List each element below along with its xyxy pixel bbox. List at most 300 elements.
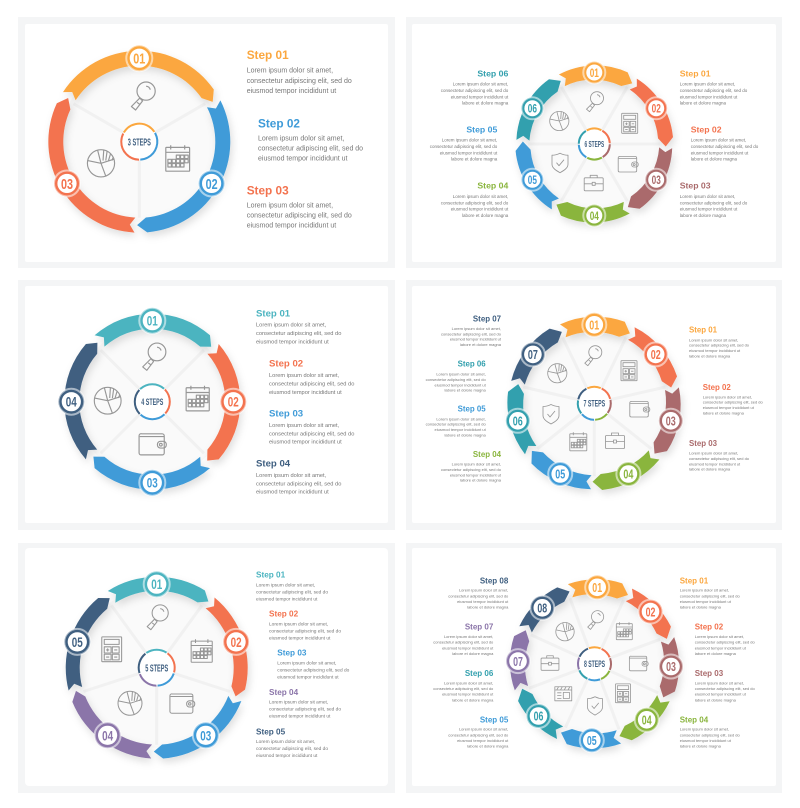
text: step 04: eiusmod tempor incididunt ut xyxy=(269,714,331,720)
text: step 05 xyxy=(448,715,509,749)
text: step 07: Lorem ipsum dolor sit amet, xyxy=(452,326,501,331)
text: step 03: Step 03 xyxy=(277,649,307,658)
icon: pie chart xyxy=(87,150,115,177)
badge 07 xyxy=(506,649,530,673)
badge 02: 02 xyxy=(651,347,661,362)
badge 01 xyxy=(139,308,165,334)
text: step 01: eiusmod tempor incididunt ut xyxy=(680,94,738,99)
text: step 02: consectetur adipiscing elit, sed do xyxy=(269,628,341,634)
badge 06 xyxy=(521,97,543,119)
text: step 05: labore et dolore magna xyxy=(467,744,509,749)
text: step 06 xyxy=(433,669,494,702)
text: step 04: Lorem ipsum dolor sit amet, xyxy=(453,194,508,199)
icon: calendar xyxy=(616,622,632,640)
text: step 04: consectetur adipiscing elit, sed do xyxy=(441,467,502,472)
text: step 03: consectetur adipiscing elit, sed do xyxy=(680,200,748,205)
text: step 03: eiusmod tempor incididunt ut xyxy=(689,461,741,466)
badge 02 xyxy=(638,600,662,624)
text: step 01: Lorem ipsum dolor sit amet, xyxy=(680,82,735,87)
text: step 05: Step 05 xyxy=(466,124,497,134)
icon: calendar xyxy=(186,386,209,411)
text: step 05: Step 05 xyxy=(256,727,286,736)
text: step 03: eiusmod tempor incididunt ut xyxy=(247,223,336,230)
icon: magnifier xyxy=(585,346,602,366)
badge 01: 01 xyxy=(589,317,599,332)
text: step 01 xyxy=(256,571,328,602)
badge 03 xyxy=(659,654,683,678)
text: step 01: Lorem ipsum dolor sit amet, xyxy=(247,68,333,75)
badge 04: 04 xyxy=(623,467,634,482)
text: step 06: labore et dolore magna xyxy=(462,101,509,106)
text: step 02: Step 02 xyxy=(269,359,303,370)
icon: briefcase xyxy=(541,656,559,670)
badge 04: 04 xyxy=(590,209,599,223)
badge 01 xyxy=(144,571,170,597)
text: step 02: labore et dolore magna xyxy=(703,410,745,415)
text: step 02: labore et dolore magna xyxy=(691,157,737,162)
text: step 01 xyxy=(247,48,352,95)
text: step 04 xyxy=(441,181,509,218)
icon: calculator xyxy=(102,637,122,662)
badge 01 xyxy=(126,45,152,71)
text: step 06: Step 06 xyxy=(477,69,508,79)
badge 05 xyxy=(548,462,572,486)
icon: briefcase xyxy=(584,175,603,191)
text: step 04: labore et dolore magna xyxy=(462,213,509,218)
badge 03 xyxy=(139,470,165,496)
icon: calendar xyxy=(570,432,587,451)
badge 03 xyxy=(659,409,683,433)
text: step 04: Lorem ipsum dolor sit amet, xyxy=(269,700,328,706)
text: step 03: labore et dolore magna xyxy=(680,213,726,218)
centre label: 4 STEPS xyxy=(141,397,163,408)
text: step 06: consectetur adipiscing elit, sed do xyxy=(441,88,509,93)
badge 07: 07 xyxy=(528,347,538,362)
badge 03: 03 xyxy=(200,727,211,743)
icon: shield check xyxy=(552,153,568,173)
panel: 7 steps xyxy=(406,280,782,530)
badge 06: 06 xyxy=(528,102,537,116)
centre label xyxy=(131,642,182,693)
badge 04 xyxy=(95,722,121,748)
text: step 03: Step 03 xyxy=(269,409,303,420)
text: step 06: Lorem ipsum dolor sit amet, xyxy=(436,372,486,377)
icon: magnifier xyxy=(131,82,155,110)
text: step 04: eiusmod tempor incididunt ut xyxy=(256,490,329,496)
icon: calendar xyxy=(191,639,212,662)
text: step 03 xyxy=(247,183,352,230)
text: step 08: labore et dolore magna xyxy=(467,605,509,610)
icon: wallet xyxy=(139,434,166,455)
badge 01: 01 xyxy=(133,51,145,68)
text: step 03: Step 03 xyxy=(695,669,724,678)
text: step 04 xyxy=(441,450,502,483)
text: step 02: Lorem ipsum dolor sit amet, xyxy=(695,634,744,639)
badge 03: 03 xyxy=(652,173,661,187)
text: step 06: labore et dolore magna xyxy=(452,697,494,702)
text: step 02: Step 02 xyxy=(258,116,300,130)
text: step 04 xyxy=(269,688,341,720)
text: step 07: consectetur adipiscing elit, sed do xyxy=(441,331,502,336)
icon: wallet xyxy=(170,694,195,713)
text: step 01: eiusmod tempor incididunt ut xyxy=(680,599,732,604)
panel: 3 steps xyxy=(18,17,395,268)
text: step 02: Step 02 xyxy=(695,623,724,632)
text: step 02: Step 02 xyxy=(269,610,299,619)
text: step 04: labore et dolore magna xyxy=(460,478,502,483)
icon: wallet xyxy=(629,656,648,671)
text: step 06: consectetur adipiscing elit, sed do xyxy=(433,686,494,691)
text: step 05 xyxy=(430,124,498,162)
text: step 02: eiusmod tempor incididunt ut xyxy=(269,390,342,396)
text: step 04: eiusmod tempor incididunt ut xyxy=(451,207,509,212)
badge 03: 03 xyxy=(666,659,676,674)
panel: 6 steps xyxy=(406,17,782,268)
text: step 04: Lorem ipsum dolor sit amet, xyxy=(452,462,501,467)
arrow ring xyxy=(64,314,240,490)
badge 02 xyxy=(199,170,225,196)
panel: 5 steps xyxy=(18,543,395,793)
text: step 04: Step 04 xyxy=(473,450,502,459)
text: step 02: Lorem ipsum dolor sit amet, xyxy=(703,394,752,399)
text: step 03: Step 03 xyxy=(680,181,711,191)
text: step 01: Lorem ipsum dolor sit amet, xyxy=(689,337,738,342)
icon: magnifier xyxy=(588,611,604,629)
text: step 04: consectetur adipiscing elit, sed do xyxy=(256,481,341,487)
badge 05 xyxy=(521,169,543,191)
text: step 05: eiusmod tempor incididunt ut xyxy=(256,753,318,759)
text: step 03 xyxy=(680,181,748,218)
text: step 01 xyxy=(689,326,750,358)
text: step 04: consectetur adipiscing elit, sed do xyxy=(269,707,341,713)
badge 01 xyxy=(585,575,609,599)
text: step 04: Step 04 xyxy=(477,181,508,191)
text: step 02: consectetur adipiscing elit, sed do xyxy=(691,144,759,149)
text: step 02 xyxy=(269,359,354,396)
badge 01: 01 xyxy=(147,313,158,329)
centre label: 3 STEPS xyxy=(128,137,151,148)
badge 04 xyxy=(58,389,84,415)
text: step 02: eiusmod tempor incididunt ut xyxy=(269,635,331,641)
text: step 01: labore et dolore magna xyxy=(689,353,731,358)
icon: pie chart xyxy=(556,622,574,641)
text: step 07: Lorem ipsum dolor sit amet, xyxy=(444,634,493,639)
text: step 06: Step 06 xyxy=(465,669,494,678)
text: step 02: Lorem ipsum dolor sit amet, xyxy=(269,373,340,379)
badge 02: 02 xyxy=(646,604,655,619)
centre label xyxy=(114,117,164,167)
text: step 05 xyxy=(256,727,328,759)
arrow ring xyxy=(509,578,680,749)
text: step 05: consectetur adipiscing elit, sed do xyxy=(426,422,486,427)
centre label: 6 STEPS xyxy=(584,139,604,149)
text: step 01: Step 01 xyxy=(689,326,718,335)
text: step 02: labore et dolore magna xyxy=(695,651,737,656)
text: step 03: eiusmod tempor incididunt ut xyxy=(269,440,342,446)
text: step 01: Step 01 xyxy=(680,576,709,585)
text: step 01: consectetur adipiscing elit, sed do xyxy=(680,88,748,93)
text: step 03: consectetur adipiscing elit, sed do xyxy=(689,456,750,461)
text: step 01: consectetur adipiscing elit, sed do xyxy=(256,589,328,595)
text: step 03: Lorem ipsum dolor sit amet, xyxy=(680,194,735,199)
icon: wallet xyxy=(618,156,638,172)
text: step 02: Lorem ipsum dolor sit amet, xyxy=(269,621,328,627)
badge 02 xyxy=(223,629,249,655)
text: step 08: consectetur adipiscing elit, sed do xyxy=(448,593,509,598)
text: step 02: Step 02 xyxy=(691,124,722,134)
text: step 01: eiusmod tempor incididunt ut xyxy=(256,596,318,602)
badge 03 xyxy=(645,169,667,191)
badge 02: 02 xyxy=(206,176,218,193)
text: step 04 xyxy=(256,459,341,496)
text: step 05: eiusmod tempor incididunt ut xyxy=(457,738,509,743)
text: step 03 xyxy=(277,649,350,680)
text: step 05: consectetur adipiscing elit, sed do xyxy=(256,746,328,752)
centre label: 8 STEPS xyxy=(584,659,605,669)
badge 02: 02 xyxy=(228,394,239,410)
centre label xyxy=(573,123,616,165)
badge 02 xyxy=(644,342,668,366)
text: step 08: Step 08 xyxy=(480,576,509,585)
text: step 06: Lorem ipsum dolor sit amet, xyxy=(453,82,508,87)
text: step 03 xyxy=(689,439,750,472)
wheel: 8 steps xyxy=(506,575,683,752)
text: step 07: labore et dolore magna xyxy=(452,651,494,656)
badge 02 xyxy=(220,389,246,415)
text: step 06: consectetur adipiscing elit, sed do xyxy=(426,377,486,382)
icon: calendar xyxy=(166,145,190,171)
text: step 03: labore et dolore magna xyxy=(689,467,731,472)
text: step 03: Lorem ipsum dolor sit amet, xyxy=(689,451,738,456)
icon: magnifier xyxy=(143,343,166,370)
text: step 02 xyxy=(691,124,759,162)
text: step 08: Lorem ipsum dolor sit amet, xyxy=(459,588,508,593)
text: step 01: labore et dolore magna xyxy=(680,101,726,106)
text: step 01: eiusmod tempor incididunt ut xyxy=(247,88,336,95)
text: step 03: consectetur adipiscing elit, sed do xyxy=(269,431,354,437)
badge 07: 07 xyxy=(513,654,523,669)
badge 04: 04 xyxy=(642,712,652,727)
icon: shield check xyxy=(543,404,559,424)
text: step 06: Lorem ipsum dolor sit amet, xyxy=(444,680,493,685)
text: step 03: Lorem ipsum dolor sit amet, xyxy=(277,660,336,666)
text: step 03: Lorem ipsum dolor sit amet, xyxy=(695,680,744,685)
text: step 02: consectetur adipiscing elit, sed do xyxy=(258,146,363,153)
text: step 05: eiusmod tempor incididunt ut xyxy=(435,427,487,432)
icon: calculator xyxy=(621,361,637,381)
wheel: 6 steps xyxy=(507,62,681,226)
text: step 02: consectetur adipiscing elit, sed do xyxy=(269,381,354,387)
centre label xyxy=(571,380,618,427)
text: step 07: labore et dolore magna xyxy=(460,342,502,347)
text: step 05: consectetur adipiscing elit, sed do xyxy=(448,732,509,737)
text: step 05 xyxy=(426,405,487,437)
text: step 03: Lorem ipsum dolor sit amet, xyxy=(247,202,333,209)
badge 05: 05 xyxy=(587,733,597,748)
panel: 4 steps xyxy=(18,280,395,530)
text: step 06: Step 06 xyxy=(458,360,486,369)
badge 01: 01 xyxy=(592,580,602,595)
badge 03 xyxy=(54,170,80,196)
icon: pie chart xyxy=(118,691,142,715)
text: step 01: Lorem ipsum dolor sit amet, xyxy=(256,323,327,329)
centre label: 7 STEPS xyxy=(583,399,605,409)
badge 05: 05 xyxy=(72,634,83,650)
text: step 05: Lorem ipsum dolor sit amet, xyxy=(459,727,508,732)
text: step 07: eiusmod tempor incididunt ut xyxy=(450,337,502,342)
text: step 01: Step 01 xyxy=(680,69,711,79)
icon: magnifier xyxy=(147,605,168,630)
text: step 05: Lorem ipsum dolor sit amet, xyxy=(256,739,315,745)
icon: pie chart xyxy=(548,364,567,383)
text: step 05: Lorem ipsum dolor sit amet, xyxy=(436,416,486,421)
text: step 02: Step 02 xyxy=(703,383,731,392)
arrow ring xyxy=(502,317,686,497)
badge 04 xyxy=(616,462,640,486)
text: step 02 xyxy=(695,623,756,656)
text: step 05: consectetur adipiscing elit, sed do xyxy=(430,144,498,149)
wheel: 3 steps xyxy=(23,45,256,253)
text: step 03: eiusmod tempor incididunt ut xyxy=(680,207,738,212)
text: step 07: Step 07 xyxy=(473,315,502,324)
badge 08 xyxy=(530,596,554,620)
badge 06 xyxy=(506,409,530,433)
text: step 04: eiusmod tempor incididunt ut xyxy=(450,472,502,477)
text: step 02: eiusmod tempor incididunt ut xyxy=(691,150,749,155)
badge 01: 01 xyxy=(590,66,599,80)
text: step 02: consectetur adipiscing elit, sed do xyxy=(695,640,756,645)
badge 03: 03 xyxy=(61,176,73,193)
text: step 07: Step 07 xyxy=(465,623,494,632)
text: step 03 xyxy=(269,409,354,446)
text: step 04: labore et dolore magna xyxy=(680,744,722,749)
badge 06: 06 xyxy=(513,413,523,428)
badge 03 xyxy=(193,722,219,748)
badge 08: 08 xyxy=(537,600,547,615)
arrow ring xyxy=(55,577,259,772)
panel: 8 steps xyxy=(406,543,782,793)
badge 05: 05 xyxy=(528,173,537,187)
text: step 07 xyxy=(441,315,502,347)
text: step 02: eiusmod tempor incididunt ut xyxy=(703,405,755,410)
icon: pie chart xyxy=(550,111,569,131)
text: step 01: consectetur adipiscing elit, sed do xyxy=(680,593,741,598)
text: step 01 xyxy=(680,576,741,610)
badge 02 xyxy=(645,97,667,119)
text: step 04 xyxy=(680,715,741,749)
text: step 01: Lorem ipsum dolor sit amet, xyxy=(256,582,315,588)
text: step 01: consectetur adipiscing elit, sed do xyxy=(256,331,341,337)
text: step 04: Step 04 xyxy=(680,715,709,724)
text: step 04: Lorem ipsum dolor sit amet, xyxy=(680,727,729,732)
icon: calculator xyxy=(622,113,638,133)
text: step 07: consectetur adipiscing elit, sed do xyxy=(433,640,494,645)
icon: shield check xyxy=(587,697,603,715)
text: step 03: Step 03 xyxy=(247,183,289,197)
icon: clapperboard xyxy=(555,687,572,701)
icon: calculator xyxy=(615,684,631,703)
text: step 01: consectetur adipiscing elit, sed do xyxy=(247,78,352,85)
text: step 02: Lorem ipsum dolor sit amet, xyxy=(691,138,746,143)
text: step 03 xyxy=(695,669,756,702)
text: step 06: eiusmod tempor incididunt ut xyxy=(442,692,494,697)
centre label xyxy=(128,377,177,426)
text: step 03: Lorem ipsum dolor sit amet, xyxy=(269,423,340,429)
text: step 05: Lorem ipsum dolor sit amet, xyxy=(442,138,497,143)
text: step 01: Step 01 xyxy=(256,571,286,580)
text: step 03: Step 03 xyxy=(689,439,718,448)
text: step 03: consectetur adipiscing elit, sed do xyxy=(247,212,352,219)
arrow ring xyxy=(23,51,256,253)
badge 07 xyxy=(521,342,545,366)
centre label: 5 STEPS xyxy=(145,663,168,674)
badge 02: 02 xyxy=(652,102,661,116)
text: step 02: eiusmod tempor incididunt ut xyxy=(695,645,747,650)
text: step 01 xyxy=(256,309,341,346)
text: step 06: labore et dolore magna xyxy=(445,388,486,393)
text: step 08: eiusmod tempor incididunt ut xyxy=(457,599,509,604)
text: step 06 xyxy=(426,360,487,393)
badge 05 xyxy=(580,728,604,752)
text: step 01: Lorem ipsum dolor sit amet, xyxy=(680,588,729,593)
centre label xyxy=(572,642,617,686)
badge 06 xyxy=(526,704,550,728)
text: step 04: eiusmod tempor incididunt ut xyxy=(680,738,732,743)
badge 01 xyxy=(582,313,606,337)
badge 01 xyxy=(583,62,605,84)
text: step 08 xyxy=(448,576,509,610)
badge 04: 04 xyxy=(66,394,77,410)
text: step 06 xyxy=(441,69,509,106)
text: step 06: eiusmod tempor incididunt ut xyxy=(451,94,509,99)
wheel: 7 steps xyxy=(502,313,686,497)
text: step 06: eiusmod tempor incididunt ut xyxy=(435,382,487,387)
text: step 02 xyxy=(258,116,363,163)
text: step 03: labore et dolore magna xyxy=(695,697,737,702)
badge 02: 02 xyxy=(231,634,242,650)
badge 06: 06 xyxy=(534,709,543,724)
text: step 03: consectetur adipiscing elit, sed do xyxy=(695,686,756,691)
text: step 04: Lorem ipsum dolor sit amet, xyxy=(256,473,327,479)
text: step 01: labore et dolore magna xyxy=(680,605,722,610)
arrow ring xyxy=(507,65,681,223)
text: step 04: Step 04 xyxy=(269,688,299,697)
badge 04 xyxy=(635,708,659,732)
text: step 05: labore et dolore magna xyxy=(445,432,486,437)
icon: pie chart xyxy=(94,387,121,414)
text: step 05: Step 05 xyxy=(458,405,486,414)
text: step 04: Step 04 xyxy=(256,459,291,470)
text: step 01: eiusmod tempor incididunt ut xyxy=(256,340,329,346)
text: step 05: eiusmod tempor incididunt ut xyxy=(440,150,498,155)
text: step 04: consectetur adipiscing elit, sed do xyxy=(441,200,509,205)
text: step 03: consectetur adipiscing elit, sed do xyxy=(277,667,350,673)
text: step 05: Step 05 xyxy=(480,715,509,724)
text: step 07: eiusmod tempor incididunt ut xyxy=(442,645,494,650)
text: step 01 xyxy=(680,69,748,106)
text: step 02: consectetur adipiscing elit, sed do xyxy=(703,400,764,405)
badge 03: 03 xyxy=(666,413,676,428)
text: step 01: Step 01 xyxy=(256,309,291,320)
text: step 03: eiusmod tempor incididunt ut xyxy=(277,674,339,680)
badge 01: 01 xyxy=(151,576,162,592)
badge 04: 04 xyxy=(102,727,113,743)
badge 05: 05 xyxy=(555,467,565,482)
text: step 03: eiusmod tempor incididunt ut xyxy=(695,692,747,697)
icon: magnifier xyxy=(586,92,604,112)
icon: briefcase xyxy=(606,433,624,448)
text: step 01: Step 01 xyxy=(247,48,289,62)
